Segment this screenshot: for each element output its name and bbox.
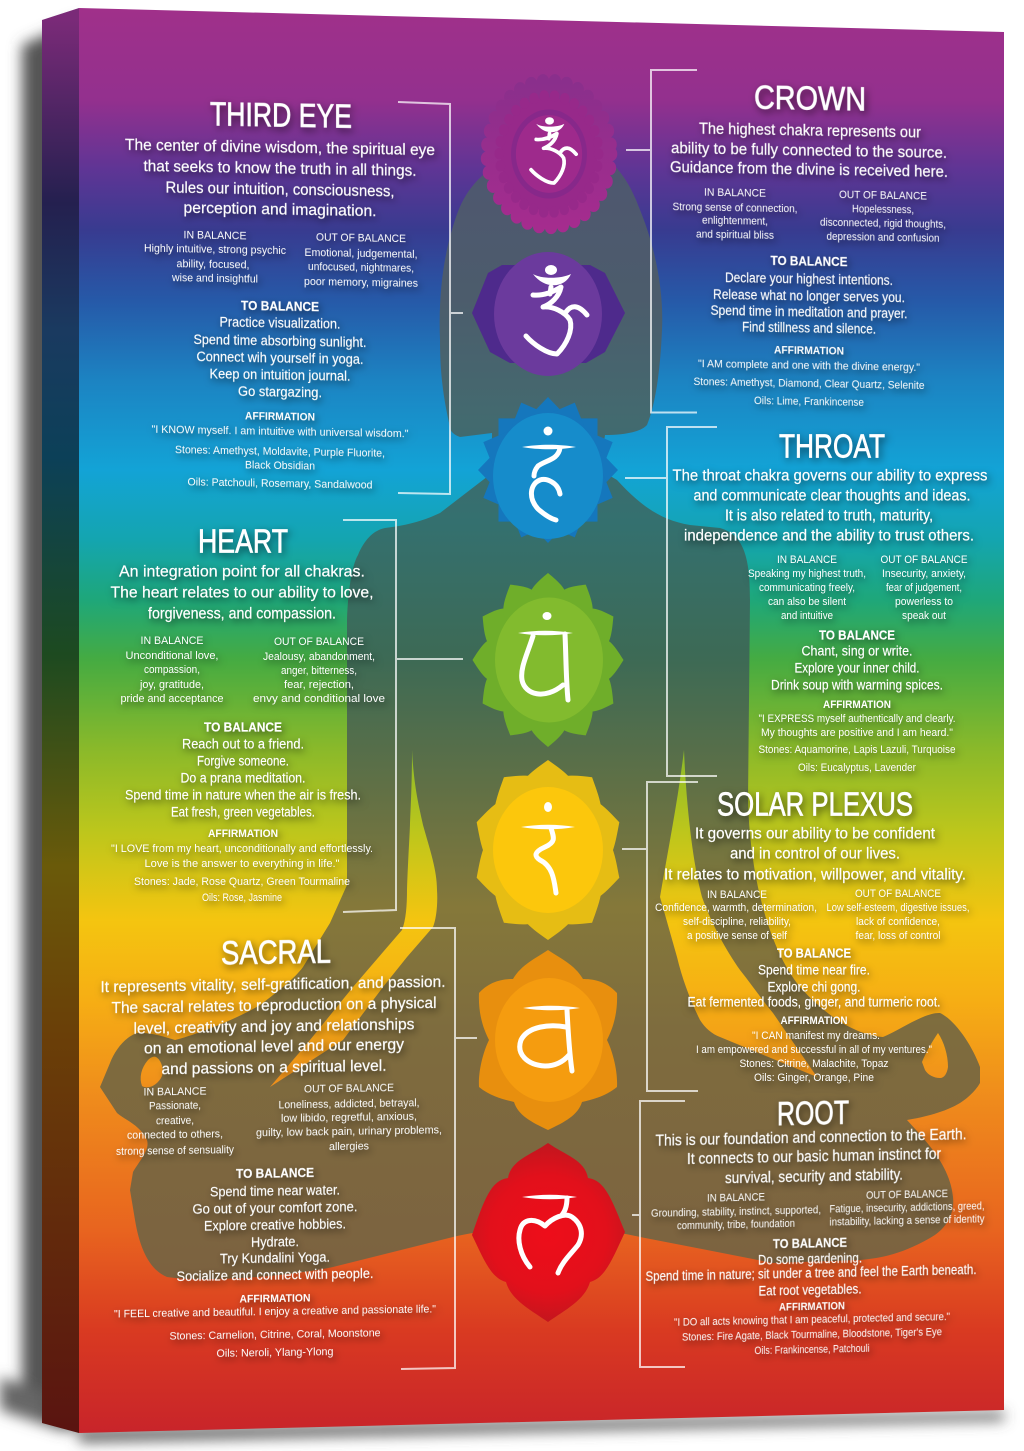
root in balance	[651, 1190, 821, 1233]
solar plexus affirmation	[696, 1015, 932, 1084]
solar plexus affirmation: I am empowered and successful in all of my ventures."	[696, 1044, 932, 1056]
root out of balance: instability, lacking a sense of identity	[830, 1213, 985, 1229]
sacral description: It represents vitality, self-gratification, and passion.	[100, 974, 445, 996]
throat in balance: Speaking my highest truth,	[748, 568, 866, 580]
solar plexus in balance: self-discipline, reliability,	[683, 916, 791, 928]
crown to balance: Release what no longer serves you.	[713, 287, 905, 305]
root out of balance	[830, 1187, 985, 1229]
solar plexus in balance: Confidence, warmth, determination,	[655, 902, 817, 914]
sacral out of balance	[256, 1082, 442, 1154]
sacral to balance: Spend time near water.	[210, 1182, 340, 1200]
root to balance	[646, 1232, 976, 1301]
leader bracket: solar plexus	[622, 782, 698, 1091]
third eye affirmation: Stones: Amethyst, Moldavite, Purple Fluorite,	[175, 444, 385, 460]
icon: om symbol (third eye)	[526, 265, 587, 354]
third eye out of balance: Emotional, judgemental,	[304, 247, 418, 261]
throat to balance: Drink soup with warming spices.	[771, 678, 943, 692]
throat affirmation: Oils: Eucalyptus, Lavender	[798, 762, 916, 774]
heart in balance: compassion,	[144, 664, 200, 676]
third eye out of balance: poor memory, migraines	[304, 276, 418, 290]
leader bracket: heart	[343, 520, 463, 912]
root affirmation: Oils: Frankincense, Patchouli	[754, 1343, 870, 1357]
crown to balance: Spend time in meditation and prayer.	[710, 303, 908, 321]
crown affirmation: AFFIRMATION	[774, 344, 844, 358]
throat out of balance: OUT OF BALANCE	[880, 554, 968, 566]
root description: This is our foundation and connection to the Earth.	[656, 1126, 966, 1150]
chakra: root	[472, 1143, 625, 1322]
heading: sacral: SACRAL	[221, 933, 331, 971]
solar plexus description	[664, 826, 966, 884]
sacral out of balance: guilty, low back pain, urinary problems,	[256, 1124, 442, 1139]
third eye out of balance: OUT OF BALANCE	[316, 232, 406, 245]
solar plexus description: It relates to motivation, willpower, and vitality.	[664, 866, 966, 884]
third eye in balance: Highly intuitive, strong psychic	[144, 243, 286, 257]
icon: vam symbol	[520, 1006, 580, 1071]
heart description	[110, 564, 374, 622]
heart to balance: TO BALANCE	[204, 720, 282, 734]
solar plexus to balance	[688, 946, 940, 1010]
throat affirmation: AFFIRMATION	[823, 699, 891, 711]
leader bracket: sacral	[400, 928, 477, 1369]
sacral to balance: Explore creative hobbies.	[204, 1216, 346, 1234]
third eye affirmation: "I KNOW myself. I am intuitive with universal wisdom."	[152, 424, 409, 440]
crown to balance: Declare your highest intentions.	[725, 270, 893, 288]
heart to balance: Reach out to a friend.	[182, 736, 304, 752]
heart to balance: Do a prana meditation.	[180, 770, 306, 786]
third eye description: The center of divine wisdom, the spiritual eye	[125, 137, 435, 159]
root out of balance: OUT OF BALANCE	[866, 1188, 948, 1202]
icon: om symbol (crown)	[531, 117, 576, 183]
throat description: and communicate clear thoughts and ideas.	[694, 488, 970, 504]
sacral in balance: strong sense of sensuality	[116, 1144, 234, 1158]
sacral to balance: Hydrate.	[251, 1234, 299, 1250]
solar plexus description: It governs our ability to be confident	[695, 826, 936, 842]
heading: solar plexus: SOLAR PLEXUS	[717, 786, 913, 822]
throat to balance	[771, 628, 943, 692]
sacral description: on an emotional level and our energy	[144, 1036, 404, 1058]
crown description: ability to be fully connected to the source.	[671, 140, 947, 162]
crown in balance	[672, 186, 798, 242]
solar plexus affirmation: "I CAN manifest my dreams.	[752, 1030, 880, 1042]
solar plexus in balance: a positive sense of self	[687, 930, 788, 942]
sacral to balance: Try Kundalini Yoga.	[220, 1250, 330, 1266]
panel: sacral	[100, 931, 445, 1362]
root description: It connects to our basic human instinct for	[687, 1146, 941, 1168]
crown description: Guidance from the divine is received here.	[670, 159, 948, 181]
sacral description	[100, 974, 445, 1079]
heart affirmation: Love is the answer to everything in life."	[144, 858, 340, 870]
throat to balance: Explore your inner child.	[794, 660, 920, 676]
chakra: heart	[472, 573, 624, 747]
sacral to balance	[176, 1164, 374, 1284]
third eye to balance	[194, 297, 366, 401]
solar plexus to balance: Spend time near fire.	[758, 962, 870, 978]
panel: root	[646, 1091, 985, 1359]
third eye affirmation: Black Obsidian	[245, 459, 315, 473]
throat in balance	[748, 554, 866, 622]
crown description: The highest chakra represents our	[699, 121, 921, 141]
crown out of balance: depression and confusion	[826, 231, 940, 245]
heart affirmation: "I LOVE from my heart, unconditionally and effortlessly.	[111, 843, 373, 855]
heart affirmation: AFFIRMATION	[208, 828, 278, 840]
crown out of balance: OUT OF BALANCE	[839, 189, 927, 203]
root to balance: Eat root vegetables.	[758, 1281, 861, 1299]
throat affirmation: "I EXPRESS myself authentically and clearly.	[758, 713, 956, 725]
solar plexus to balance: Eat fermented foods, ginger, and turmeric root.	[688, 994, 940, 1010]
root in balance: Grounding, stability, instinct, supported,	[651, 1204, 821, 1220]
leader bracket: crown	[626, 70, 697, 412]
throat affirmation	[758, 699, 956, 774]
crown in balance: IN BALANCE	[704, 187, 766, 200]
throat in balance: IN BALANCE	[777, 554, 837, 566]
heart to balance	[125, 720, 361, 820]
leader bracket: root	[632, 1101, 685, 1367]
heart description: An integration point for all chakras.	[119, 564, 365, 580]
third eye in balance: wise and insightful	[171, 272, 258, 286]
third eye in balance: ability, focused,	[176, 258, 249, 271]
heart out of balance: OUT OF BALANCE	[274, 636, 364, 648]
crown affirmation: "I AM complete and one with the divine energy."	[698, 358, 920, 374]
throat affirmation: My thoughts are positive and I am heard."	[761, 727, 953, 739]
throat in balance: and intuitive	[781, 610, 833, 622]
crown to balance: Find stillness and silence.	[742, 319, 876, 337]
sacral affirmation: Oils: Neroli, Ylang-Ylong	[216, 1346, 334, 1360]
third eye affirmation: AFFIRMATION	[245, 410, 315, 424]
leader bracket: third eye	[398, 102, 463, 494]
root affirmation	[674, 1298, 950, 1359]
solar plexus out of balance	[826, 888, 970, 942]
chakra: crown	[487, 81, 611, 227]
sacral to balance: Go out of your comfort zone.	[192, 1199, 357, 1217]
chakra: sacral	[479, 950, 617, 1130]
heart to balance: Eat fresh, green vegetables.	[171, 804, 315, 820]
heart to balance: Forgive someone.	[197, 754, 289, 768]
throat description	[672, 468, 988, 544]
sacral affirmation: AFFIRMATION	[239, 1292, 311, 1306]
icon: lam symbol	[519, 1195, 581, 1273]
panel: solar plexus	[655, 786, 970, 1084]
sacral in balance: IN BALANCE	[143, 1086, 206, 1099]
heart in balance: IN BALANCE	[140, 635, 204, 647]
chakra: third eye	[472, 252, 625, 376]
throat affirmation: Stones: Aquamorine, Lapis Lazuli, Turquoise	[758, 744, 956, 756]
third eye affirmation: Oils: Patchouli, Rosemary, Sandalwood	[188, 476, 372, 492]
throat out of balance: powerless to	[895, 596, 953, 608]
heart out of balance: envy and conditional love	[253, 693, 385, 705]
heart description: forgiveness, and compassion.	[148, 606, 336, 622]
heart affirmation: Stones: Jade, Rose Quartz, Green Tourmaline	[134, 876, 350, 888]
canvas side face	[42, 8, 79, 1433]
sacral out of balance: low libido, regretful, anxious,	[281, 1111, 417, 1125]
sacral affirmation	[114, 1290, 436, 1362]
third eye to balance: Go stargazing.	[238, 384, 322, 400]
solar plexus in balance: IN BALANCE	[707, 889, 767, 901]
solar plexus out of balance: fear, loss of control	[856, 930, 940, 942]
heart in balance: pride and acceptance	[120, 693, 224, 705]
heading: root: ROOT	[777, 1094, 849, 1132]
root to balance: Do some gardening.	[758, 1250, 862, 1268]
third eye to balance: Spend time absorbing sunlight.	[194, 332, 366, 350]
icon: ham symbol	[522, 426, 576, 520]
solar plexus description: and in control of our lives.	[730, 846, 900, 862]
heart in balance	[120, 635, 224, 705]
heart out of balance: anger, bitterness,	[281, 665, 357, 677]
chakra: throat	[478, 397, 618, 543]
throat out of balance: speak out	[902, 610, 946, 622]
root in balance: IN BALANCE	[707, 1191, 765, 1205]
crown affirmation: Stones: Amethyst, Diamond, Clear Quartz, Selenite	[694, 376, 924, 392]
crown to balance: TO BALANCE	[770, 253, 848, 269]
crown to balance	[710, 252, 908, 337]
panel: throat	[672, 428, 988, 774]
throat description: independence and the ability to trust others.	[684, 528, 974, 544]
crown affirmation: Oils: Lime, Frankincense	[754, 395, 864, 409]
throat in balance: communicating freely,	[759, 582, 855, 594]
root to balance: TO BALANCE	[773, 1235, 847, 1251]
root description	[656, 1126, 966, 1189]
solar plexus out of balance: Low self-esteem, digestive issues,	[826, 902, 970, 914]
solar plexus affirmation: AFFIRMATION	[780, 1015, 848, 1027]
panel: third eye	[125, 94, 435, 493]
heart in balance: Unconditional love,	[126, 650, 218, 662]
throat out of balance	[880, 554, 968, 622]
crown in balance: enlightenment,	[702, 214, 768, 228]
throat description: The throat chakra governs our ability to express	[672, 468, 988, 484]
third eye description: perception and imagination.	[184, 200, 376, 220]
crown in balance: and spiritual bliss	[696, 228, 774, 242]
crown affirmation	[694, 343, 924, 410]
solar plexus to balance: TO BALANCE	[777, 946, 851, 960]
heart out of balance	[253, 636, 385, 705]
sacral affirmation: Stones: Carnelion, Citrine, Coral, Moonstone	[169, 1327, 380, 1343]
solar plexus affirmation: Stones: Citrine, Malachite, Topaz	[740, 1058, 888, 1070]
crown in balance: Strong sense of connection,	[672, 201, 798, 215]
sacral to balance: Socialize and connect with people.	[176, 1266, 374, 1284]
throat out of balance: Insecurity, anxiety,	[882, 568, 966, 580]
leader bracket: throat	[625, 427, 717, 776]
icon: ram symbol	[521, 802, 575, 893]
sacral in balance	[116, 1085, 234, 1158]
heading: third eye: THIRD EYE	[210, 95, 352, 135]
sacral in balance: Passionate,	[149, 1100, 201, 1112]
icon: yam symbol	[518, 612, 573, 700]
crown description	[670, 120, 948, 181]
root affirmation: AFFIRMATION	[779, 1300, 845, 1314]
crown out of balance: Hopelessness,	[852, 203, 914, 217]
sacral description: The sacral relates to reproduction on a physical	[111, 995, 436, 1017]
heart description: The heart relates to our ability to love,	[110, 584, 374, 602]
panel: heart	[110, 522, 385, 904]
crown out of balance	[820, 189, 946, 245]
third eye to balance: Practice visualization.	[220, 314, 340, 332]
chakra: solar plexus	[466, 752, 630, 948]
third eye to balance: TO BALANCE	[241, 298, 319, 314]
throat out of balance: fear of judgement,	[886, 582, 962, 594]
sacral in balance: creative,	[156, 1115, 194, 1127]
crown out of balance: disconnected, rigid thoughts,	[820, 217, 946, 231]
panel: crown	[670, 77, 948, 410]
third eye description: Rules our intuition, consciousness,	[166, 179, 395, 200]
sacral affirmation: "I FEEL creative and beautiful. I enjoy a creative and passionate life."	[114, 1303, 436, 1321]
solar plexus out of balance: OUT OF BALANCE	[855, 888, 941, 900]
throat to balance: TO BALANCE	[819, 628, 895, 642]
heart in balance: joy, gratitude,	[139, 679, 204, 691]
third eye to balance: Keep on intuition journal.	[210, 366, 350, 384]
heart affirmation: Oils: Rose, Jasmine	[202, 892, 282, 904]
heart affirmation	[111, 828, 373, 904]
solar plexus in balance	[655, 889, 817, 942]
root description: survival, security and stability.	[725, 1167, 903, 1187]
sacral description: level, creativity and joy and relationships	[133, 1016, 415, 1038]
sacral in balance: connected to others,	[127, 1128, 223, 1142]
third eye affirmation	[152, 409, 409, 492]
sacral out of balance: Loneliness, addicted, betrayal,	[278, 1097, 419, 1112]
third eye in balance: IN BALANCE	[184, 229, 246, 242]
root in balance: community, tribe, foundation	[677, 1218, 795, 1232]
root affirmation: Stones: Fire Agate, Black Tourmaline, Bloodstone, Tiger's Eye	[682, 1326, 942, 1344]
solar plexus to balance: Explore chi gong.	[768, 980, 860, 994]
heart out of balance: Jealousy, abandonment,	[263, 651, 375, 663]
third eye to balance: Connect wih yourself in yoga.	[196, 349, 363, 367]
heart out of balance: fear, rejection,	[284, 679, 354, 691]
third eye out of balance	[304, 231, 418, 290]
heart to balance: Spend time in nature when the air is fresh.	[125, 788, 361, 802]
root to balance: Spend time in nature; sit under a tree and feel the Earth beneath.	[646, 1262, 976, 1284]
heading: heart: HEART	[198, 522, 288, 560]
heading: crown: CROWN	[754, 79, 866, 117]
third eye description: that seeks to know the truth in all things.	[144, 158, 416, 180]
throat in balance: can also be silent	[768, 596, 846, 608]
third eye out of balance: unfocused, nightmares,	[308, 261, 414, 275]
third eye in balance	[144, 229, 286, 286]
sacral out of balance: allergies	[329, 1141, 369, 1153]
silhouette: meditating figure	[100, 140, 980, 1279]
sacral out of balance: OUT OF BALANCE	[304, 1082, 394, 1096]
third eye description	[125, 137, 435, 221]
sacral to balance: TO BALANCE	[236, 1165, 314, 1181]
root out of balance: Fatigue, insecurity, addictions, greed,	[830, 1200, 985, 1216]
throat description: It is also related to truth, maturity,	[725, 508, 933, 524]
heading: throat: THROAT	[779, 428, 885, 464]
sacral description: and passions on a spiritual level.	[161, 1058, 386, 1078]
root affirmation: "I DO all acts knowing that I am peaceful, protected and secure."	[674, 1311, 950, 1329]
solar plexus affirmation: Oils: Ginger, Orange, Pine	[754, 1072, 874, 1084]
solar plexus out of balance: lack of confidence,	[856, 916, 940, 928]
throat to balance: Chant, sing or write.	[802, 644, 912, 658]
